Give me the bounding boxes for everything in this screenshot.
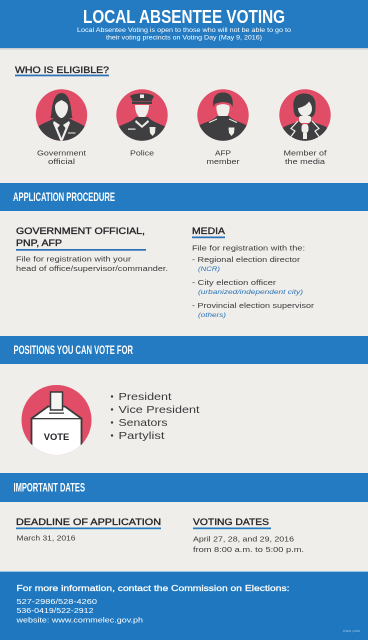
icon: member of the media bbox=[279, 89, 331, 145]
list: positions: Senators bbox=[118, 418, 168, 429]
heading: media bbox=[192, 226, 225, 238]
label: afp member: member bbox=[206, 157, 240, 166]
footer contact details bbox=[15, 597, 143, 624]
section band: important dates: IMPORTANT DATES bbox=[14, 482, 85, 494]
label: vote: VOTE bbox=[44, 432, 69, 442]
text: voting dates detail: from 8:00 a.m. to 5:00 p.m. bbox=[193, 545, 304, 554]
label: afp member: AFP bbox=[215, 148, 231, 158]
text: media instructions: (urbanized/independent city) bbox=[198, 289, 303, 296]
text: voting dates detail: April 27, 28, and 29, 2016 bbox=[193, 534, 294, 544]
list: positions: Partylist bbox=[118, 431, 165, 442]
icon: police bbox=[116, 89, 168, 141]
section band: application procedure: APPLICATION PROCEDURE bbox=[13, 192, 115, 204]
footer contact details: 527-2986/528-4260 bbox=[16, 597, 97, 606]
list: positions: President bbox=[118, 392, 172, 403]
text: media instructions: File for registration with the: bbox=[192, 244, 305, 252]
icon: government official bbox=[36, 89, 88, 141]
header subtitle: Local Absentee Voting is open to those who will not be able to go to bbox=[77, 27, 291, 34]
label: government official: official bbox=[48, 157, 76, 166]
text: media instructions: - Regional election director bbox=[192, 255, 301, 264]
text: media instructions: (NCR) bbox=[198, 266, 220, 273]
heading: deadline of application: DEADLINE OF APPLICATION bbox=[16, 517, 161, 527]
footer panel: contact information bbox=[0, 571, 368, 640]
label: government official: Government bbox=[37, 148, 86, 158]
heading: voting dates: VOTING DATES bbox=[193, 517, 269, 527]
footer contact details: website: www.commelec.gov.ph bbox=[15, 616, 143, 624]
label: member of the media bbox=[284, 148, 326, 166]
section band: positions you can vote for: POSITIONS YOU CAN VOTE FOR bbox=[14, 345, 133, 357]
text: government official instructions bbox=[16, 254, 168, 273]
header banner bbox=[0, 0, 368, 50]
heading: voting dates bbox=[193, 517, 271, 529]
text: government official instructions: head of office/supervisor/commander. bbox=[16, 264, 168, 273]
title: LOCAL ABSENTEE VOTING bbox=[83, 7, 285, 27]
text: media instructions: (others) bbox=[198, 312, 226, 319]
text: media instructions bbox=[192, 244, 315, 319]
text: voting dates detail bbox=[193, 534, 304, 554]
label: government official bbox=[37, 148, 86, 166]
header subtitle: their voting precincts on Voting Day (May 9, 2016) bbox=[106, 34, 262, 41]
list: positions bbox=[111, 392, 200, 442]
text: media instructions: - City election officer bbox=[192, 278, 277, 287]
heading: government official, pnp, afp: PNP, AFP bbox=[16, 238, 62, 248]
section band: application procedure bbox=[0, 183, 368, 211]
section band: important dates bbox=[0, 473, 368, 502]
label: member of the media: Member of bbox=[284, 148, 326, 158]
label: police: Police bbox=[130, 148, 154, 158]
heading: government official, pnp, afp bbox=[16, 226, 146, 251]
section band: positions you can vote for bbox=[0, 336, 368, 364]
credit: KSDS | 2016 bbox=[343, 629, 360, 633]
icon: ballot box bbox=[22, 385, 92, 460]
heading: media: MEDIA bbox=[192, 226, 225, 236]
label: afp member bbox=[206, 148, 240, 166]
text: deadline date: March 31, 2016 bbox=[16, 534, 76, 542]
label: member of the media: the media bbox=[285, 157, 325, 166]
heading: government official, pnp, afp: GOVERNMENT OFFICIAL, bbox=[16, 226, 145, 236]
footer contact details: 536-0419/522-2912 bbox=[16, 606, 94, 615]
header subtitle bbox=[77, 27, 291, 41]
footer heading: For more information, contact the Commission on Elections: bbox=[16, 583, 290, 593]
list: positions: Vice President bbox=[118, 405, 200, 416]
text: media instructions: - Provincial election supervisor bbox=[192, 301, 315, 310]
text: government official instructions: File for registration with your bbox=[16, 254, 132, 264]
icon: afp member bbox=[197, 89, 249, 141]
heading: who is eligible: WHO IS ELIGIBLE? bbox=[15, 65, 109, 75]
